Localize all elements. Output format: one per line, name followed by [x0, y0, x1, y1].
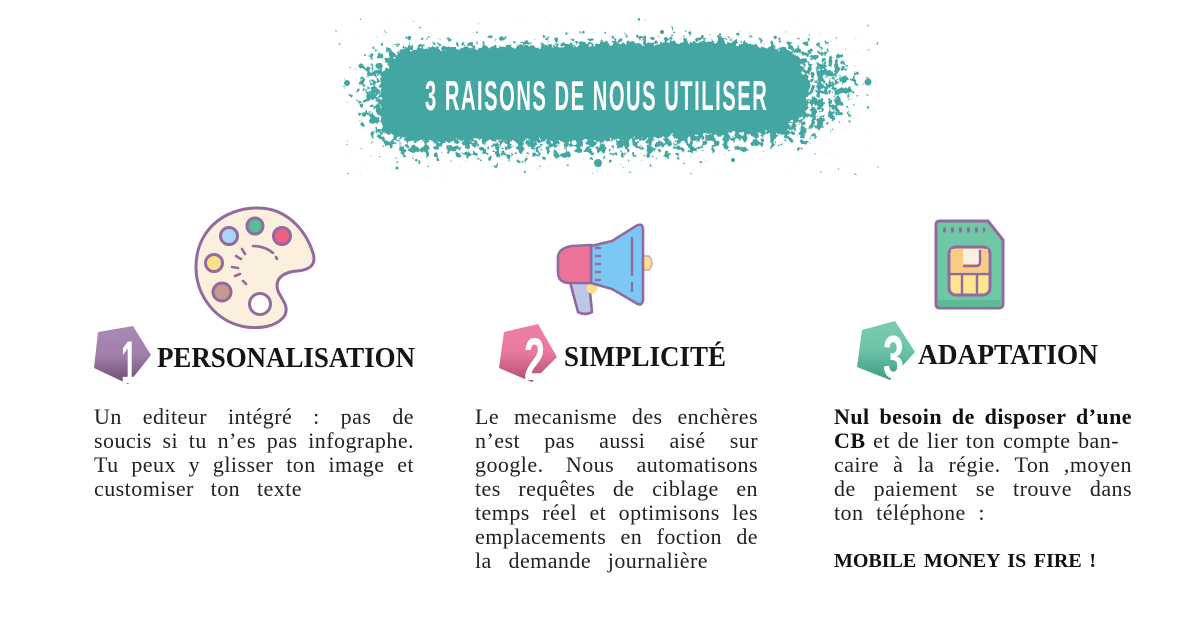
badge 2	[499, 324, 557, 393]
text block: adaptation: caire à la régie. Ton ,moyen	[834, 452, 1132, 477]
megaphone rear bump	[640, 256, 652, 270]
icon: paint palette	[196, 208, 314, 328]
megaphone small button	[586, 282, 598, 294]
text block: adaptation	[834, 404, 1132, 572]
badge 3	[857, 321, 915, 391]
text block: simplicite: la demande journalière	[475, 548, 708, 573]
heading: personalisation: PERSONALISATION	[157, 342, 415, 374]
text block: simplicite: emplacements en foction de	[475, 524, 758, 549]
paint specks	[344, 30, 872, 170]
heading: simplicite: SIMPLICITÉ	[564, 340, 726, 373]
text block: personalisation: Un editeur intégré : pas de	[94, 404, 414, 429]
text block: simplicite: google. Nous automatisons	[475, 452, 758, 477]
megaphone cone	[591, 225, 643, 304]
text block: simplicite	[475, 404, 758, 573]
text block: adaptation: MOBILE MONEY IS FIRE !	[834, 550, 1096, 572]
badge 3: 3	[883, 324, 904, 391]
text block: personalisation	[94, 404, 414, 501]
badge 2: 2	[524, 326, 545, 393]
megaphone handle	[570, 282, 592, 314]
icon: SIM card	[936, 221, 1003, 308]
text block: adaptation: ton téléphone :	[834, 500, 985, 525]
badge 1	[94, 326, 151, 396]
badge 1: 1	[121, 329, 137, 396]
text block: simplicite: tes requêtes de ciblage en	[475, 476, 758, 501]
text block: adaptation: Nul besoin de disposer d’une	[834, 404, 1132, 429]
text block: simplicite: n’est pas aussi aisé sur	[475, 428, 758, 453]
text block: personalisation: customiser ton texte	[94, 476, 302, 501]
text block: adaptation: CB et de lier ton compte ban-	[834, 428, 1119, 453]
text block: personalisation: Tu peux y glisser ton image et	[94, 452, 414, 477]
text block: simplicite: temps réel et optimisons les	[475, 500, 758, 525]
title text: 3 RAISONS DE NOUS UTILISER	[425, 72, 767, 119]
paint splatter	[344, 30, 872, 170]
heading: adaptation: ADAPTATION	[918, 339, 1098, 371]
title banner	[344, 30, 872, 170]
megaphone body	[558, 245, 591, 283]
text block: personalisation: soucis si tu n’es pas infographe.	[94, 428, 414, 453]
icon: megaphone	[558, 225, 652, 314]
text block: adaptation: de paiement se trouve dans	[834, 476, 1132, 501]
text block: simplicite: Le mecanisme des enchères	[475, 404, 758, 429]
